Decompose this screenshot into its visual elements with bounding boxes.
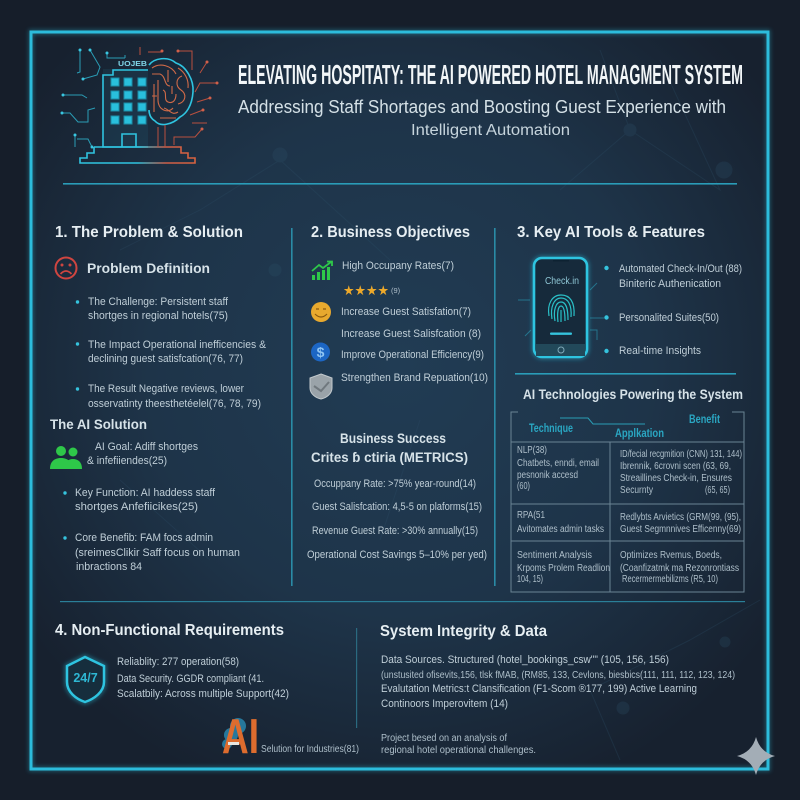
table row: sentiment analysis — [517, 550, 739, 585]
heading: section 3: 3. Key AI Tools & Features — [517, 224, 705, 241]
panel: system integrity and data — [380, 623, 735, 756]
table row: NLP: Chatbets, enndi, email — [517, 458, 599, 469]
requirements list: Scalatbily: Across multiple Support(42) — [117, 688, 289, 700]
panel: business objectives — [307, 224, 488, 561]
AI solution list: shortges Anfefiicikes(25) — [75, 501, 198, 513]
metrics list: Operational Cost Savings 5–10% per yed) — [307, 549, 487, 561]
heading: success criteria — [311, 431, 468, 465]
panel: key AI tools — [511, 224, 744, 592]
table row: sentiment analysis: Recermermebilizms (R5, 10) — [622, 574, 718, 585]
table row: RPA — [517, 510, 741, 535]
metrics list: Occuppany Rate: >75% year-round(14) — [314, 478, 476, 490]
table header: Technique — [529, 421, 573, 435]
footnote: Project besed on an analysis of — [381, 733, 507, 744]
icon: sparkle — [737, 737, 775, 775]
data sources text: Continoors Imperovitem (14) — [381, 698, 508, 710]
heading: system integrity: System Integrity & Data — [380, 623, 547, 640]
table row: RPA: Avitomates admin tasks — [517, 524, 604, 535]
objective: guest satisfaction: Increase Guest Salisfcation (8) — [341, 328, 481, 340]
table row: NLP: Streaillines Check-in, Ensures — [620, 473, 732, 484]
table row: RPA: RPA(51 — [517, 510, 545, 521]
table row: sentiment analysis: (Coanfizatmk ma Rezonrontiass — [620, 563, 739, 574]
AI solution list: & infefiiendes(25) — [87, 455, 167, 467]
caption: solution for industries: Selution for Industries(81) — [261, 744, 359, 755]
metrics list: Revenue Guest Rate: >30% annually(15) — [312, 525, 478, 537]
subtitle: Addressing Staff Shortages and Boosting Guest Experience with — [238, 96, 726, 117]
heading: section 4: 4. Non-Functional Requirements — [55, 622, 284, 639]
problem bullet list: declining guest satisfcation(76, 77) — [88, 353, 243, 365]
feature list — [604, 263, 742, 357]
table row: sentiment analysis: Sentiment Analysis — [517, 550, 592, 561]
panel: the problem and solution — [50, 224, 267, 573]
AI solution list: Core Benefib: FAM focs admin — [75, 532, 213, 544]
icon: 24/7 shield — [67, 657, 104, 702]
problem bullet list: shortges in regional hotels(75) — [88, 310, 228, 322]
star rating: ★★★★ — [343, 283, 389, 298]
table header: Benefit — [689, 412, 720, 426]
panel: non-functional requirements — [55, 622, 359, 764]
AI solution list: AI Goal: Adiff shortges — [95, 441, 198, 453]
table row: sentiment analysis: Krpoms Prolem Readlion — [517, 563, 610, 574]
problem bullet list: The Impact Operational inefficencies & — [88, 339, 267, 351]
icon: 24/7 shield: 24/7 — [73, 671, 98, 685]
table row: NLP — [517, 445, 742, 496]
table row: NLP: NLP(38) — [517, 445, 547, 456]
feature list: Biniteric Authenication — [619, 278, 721, 290]
table row: NLP: Securnty — [620, 485, 653, 496]
icon: growth chart — [312, 262, 332, 280]
table row: NLP: ID/fecial recgmition (CNN) 131, 144) — [620, 449, 742, 460]
AI solution list — [63, 441, 240, 573]
star rating: (9) — [391, 286, 401, 295]
icon: dollar: $ — [317, 344, 325, 360]
table row: NLP: Ibrennik, 6crovni scen (63, 69, — [620, 461, 731, 472]
AI solution list: (sreimesClikir Saff focus on human — [75, 547, 240, 559]
heading: AI technologies: AI Technologies Powering the System — [523, 387, 743, 402]
data sources text: Evalutation Metrics:t Clansification (F1-Scom ®177, 199) Active Learning — [381, 683, 697, 695]
heading: success criteria: Business Success — [340, 431, 446, 446]
subtitle: Intelligent Automation — [411, 122, 570, 139]
objective: occupancy: High Occupany Rates(7) — [342, 260, 454, 272]
table row: RPA: Redlybts Arvietics (GRM(99, (95), — [620, 512, 741, 523]
icon: hotel and AI brain — [60, 47, 218, 163]
metrics list: Guest Salisfcation: 4,5-5 on plaforms(15) — [312, 501, 482, 513]
table row: RPA: Guest Segmnnives Efficenny(69) — [620, 524, 741, 535]
icon: smiley — [311, 302, 331, 322]
table row: sentiment analysis: Optimizes Rvemus, Boeds, — [620, 550, 722, 561]
AI solution list: inbractions 84 — [76, 561, 142, 573]
table row: sentiment analysis: 104, 15) — [517, 574, 543, 585]
header panel — [60, 47, 743, 163]
heading: section 1: 1. The Problem & Solution — [55, 224, 243, 241]
footnote: regional hotel operational challenges. — [381, 745, 536, 756]
table: AI technologies — [511, 412, 744, 592]
metrics list — [307, 478, 487, 561]
subtitle — [238, 96, 726, 139]
AI solution list: Key Function: AI haddess staff — [75, 487, 216, 499]
problem bullet list: osservatinty theesthetéelel(76, 78, 79) — [88, 398, 261, 410]
objective: guest satisfaction — [341, 306, 481, 340]
problem bullet list: The Challenge: Persistent staff — [88, 296, 229, 308]
icon: green people — [50, 446, 82, 469]
data sources text: Data Sources. Structured (hotel_bookings_csw"" (105, 156, 156) — [381, 654, 669, 666]
icon: phone with fingerprint: Check.in — [545, 276, 579, 287]
table row: NLP: pesnonik accesd — [517, 470, 578, 481]
feature list: Personalited Suites(50) — [619, 312, 719, 324]
icon: hotel and AI brain: UOJEB — [118, 59, 148, 68]
feature list: Automated Check-In/Out (88) — [619, 263, 742, 275]
table row: NLP: (65, 65) — [705, 485, 730, 496]
table header: Applkation — [615, 426, 664, 440]
data sources text — [381, 654, 735, 710]
subheading: the AI solution: The AI Solution — [50, 417, 147, 432]
table row: NLP: (60) — [517, 481, 530, 492]
icon: brand shield — [310, 374, 332, 399]
heading: section 2: 2. Business Objectives — [311, 224, 470, 241]
table header — [529, 412, 720, 440]
problem bullet list — [76, 296, 267, 410]
subheading: problem definition: Problem Definition — [87, 261, 210, 276]
objective: efficiency: Improve Operational Efficiency(9) — [341, 349, 484, 361]
data sources text: (unstusited ofisevits,156, tlsk fMAB, (RM85, 133, Cevlons, biesbics(111, 111, 112, 123, 124) — [381, 670, 735, 681]
problem bullet list: The Result Negative reviews, lower — [88, 383, 244, 395]
requirements list: Data Security. GGDR compliant (41. — [117, 673, 264, 685]
objective: brand: Strengthen Brand Repuation(10) — [341, 372, 488, 384]
requirements list: Reliablity: 277 operation(58) — [117, 656, 239, 668]
icon: dollar — [311, 342, 330, 362]
icon: phone with fingerprint — [518, 258, 604, 357]
footnote — [381, 733, 536, 756]
objective: guest satisfaction: Increase Guest Satisfation(7) — [341, 306, 471, 318]
icon: AI logo: AI — [222, 710, 259, 764]
feature list: Real-time Insights — [619, 345, 701, 357]
requirements list — [117, 656, 289, 700]
icon: sad face — [56, 258, 76, 278]
heading: success criteria: Crites ɓ ctiria (METRICS) — [311, 450, 468, 465]
